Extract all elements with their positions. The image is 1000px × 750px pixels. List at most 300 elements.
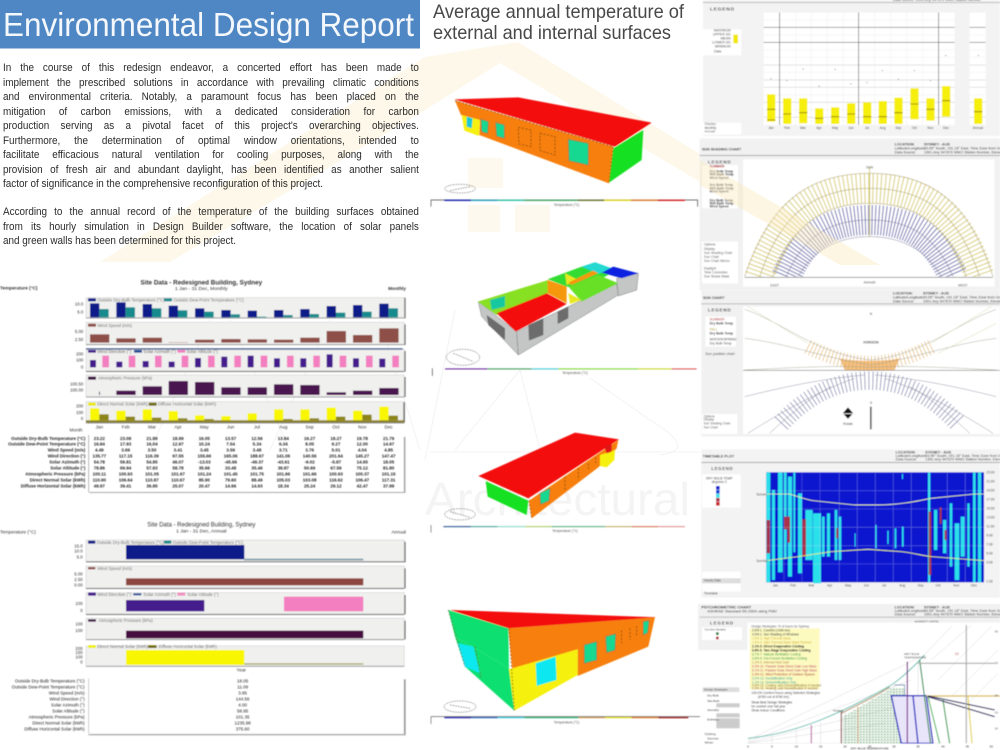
panel 3 bars: Solar Azimuth (°): [143, 349, 176, 354]
month axis: Jul: [254, 424, 260, 429]
temperature axis: 5: [771, 744, 773, 748]
arch base axis: [745, 165, 993, 288]
data table: 46.07: [172, 460, 184, 465]
chart annotation: HUMIDITY RATIO: [915, 620, 939, 624]
axis labels: 200: [75, 646, 83, 651]
data table: 14.66: [225, 484, 237, 489]
data table: 37.99: [383, 484, 395, 489]
strategy list: yellow box: 3.8% 8. Fan-Forced Ventilation Cooling: [752, 656, 807, 660]
data table: 6.34: [279, 442, 288, 447]
side details: [529, 457, 596, 518]
grid lines: [766, 472, 984, 582]
legend: Annual: [705, 130, 715, 134]
strategy list: yellow box: 3.2% 13. Humidification Only: [752, 676, 793, 680]
axis labels: May: [845, 584, 851, 588]
data table: 5.34: [253, 442, 262, 447]
data table: 54.78: [94, 460, 105, 465]
month axis: Month: [70, 428, 83, 433]
data table: 4.49: [95, 448, 104, 453]
body text: paragraph 1: [3, 62, 419, 190]
data table: 13.57: [225, 436, 237, 441]
body text: paragraph 1: facilitate efficacious natural ventilation for cooling purposes, along with the: [3, 149, 419, 161]
axis labels: Dec: [943, 126, 949, 130]
panel 5 bars: Direct Normal Solar (kWh): [97, 402, 148, 407]
data table: 14.65: [357, 460, 368, 465]
axis labels: Apr: [827, 584, 833, 588]
panel 2 bars: 2.50: [75, 337, 84, 342]
data table: 147.47: [382, 454, 396, 459]
legend: LEGEND: [711, 466, 733, 471]
chart title: Temperature (°C): [0, 286, 38, 291]
chart header: [701, 291, 1000, 304]
temperature axis: 10: [795, 744, 798, 748]
data table: 18.05: [237, 678, 249, 683]
legend: Options: [704, 243, 716, 247]
data table: 3.69: [121, 448, 131, 453]
data table: 50.69: [304, 466, 316, 471]
data table: 110.90: [93, 478, 107, 483]
axis labels: 100: [75, 655, 83, 660]
axis labels: 0: [80, 659, 83, 664]
chart header: LOCATION:: [896, 450, 916, 454]
body text: paragraph 2: from its hourly simulation in Design Builder software, the location of solar panels: [3, 220, 419, 232]
data table: 23.22: [94, 436, 105, 441]
comfort scatter: [843, 688, 911, 743]
legend: [702, 307, 737, 434]
body text: paragraph 1: production serving as a pivotal facet of this project's overarching objectives.: [3, 120, 419, 132]
arch base axis: SUN: [866, 165, 874, 169]
axis labels: Jan: [768, 126, 774, 130]
chart header: Data Source:: [895, 613, 916, 617]
data table: 101.66: [303, 472, 317, 477]
panel 5 bars: [76, 402, 404, 422]
window: green: [540, 488, 550, 504]
data table: 4.85: [384, 448, 393, 453]
data table: Outside Dry-Bulb Temperature (°C): [15, 678, 85, 683]
chart header: SUN CHART: [703, 296, 725, 300]
data table: 57.83: [146, 466, 158, 471]
data table: 165.06: [224, 454, 238, 459]
chart title: [0, 279, 406, 292]
strategy list: yellow box: 6.1% 11. Passive Solar Direct Gain High Mass: [752, 668, 817, 672]
body text: paragraph 1: Furthermore, the determination of optimal window orientations, intended to: [3, 134, 419, 146]
wall: green upper: [448, 610, 509, 668]
axis labels: Sep: [918, 584, 924, 588]
axis labels: 19:00: [986, 488, 995, 492]
panel 5 bars: 100: [76, 410, 84, 415]
panel 4 bars: 100.50: [70, 382, 84, 387]
arch base axis: EAST: [770, 284, 779, 288]
data table: 9.27: [332, 442, 341, 447]
data table: -43.61: [277, 460, 290, 465]
axis labels: 5.0: [77, 554, 83, 559]
legend: Sun Shading Chart: [704, 422, 730, 426]
data table: Direct Normal Solar (kWh): [30, 478, 86, 483]
axis labels: Jun: [848, 126, 854, 130]
data table: Diffuse Horizontal Solar (kWh): [24, 727, 85, 732]
chart: psychrometric chart: [698, 604, 1000, 750]
building render: interior section: [432, 262, 697, 376]
data table: 110.67: [171, 478, 185, 483]
chart title: [0, 523, 406, 534]
strategy list: yellow box: 2.1% 5. Direct Evaporative Cooling: [752, 644, 804, 648]
axis labels: 150: [75, 650, 83, 655]
chart title: Monthly: [388, 286, 406, 291]
axis labels: 7:00: [986, 542, 993, 546]
data table: 14.97: [383, 442, 395, 447]
windows: dark grey: [487, 307, 568, 341]
data table: 79.60: [225, 478, 237, 483]
legend: degrees C: [712, 480, 728, 484]
wall: green end: [609, 130, 643, 183]
axis labels: 13:00: [986, 515, 995, 519]
building render: external view 2: [431, 433, 685, 533]
chart: sun shading chart: [700, 138, 1000, 290]
axis labels: Mar: [800, 126, 807, 130]
temperature axis: 15: [819, 744, 823, 748]
data table: 19.78: [357, 436, 368, 441]
comfort polygon: [891, 696, 933, 743]
data table: Diffuse Horizontal Solar (kWh): [21, 484, 86, 489]
comfort note: for comfort over full year: [751, 704, 785, 708]
legend: LEGEND: [710, 621, 734, 626]
axis labels: [756, 470, 995, 588]
data table: 36.85: [146, 484, 158, 489]
wall: yellow: [462, 115, 480, 136]
data table: 145.27: [355, 454, 370, 459]
data table: 201.64: [329, 454, 343, 459]
chart header: Data Source:: [896, 458, 917, 462]
data table: -9.02: [305, 460, 315, 465]
panel 2 bars: 5.00: [75, 329, 84, 334]
partition: orange: [548, 280, 567, 303]
data table: 33.48: [225, 466, 237, 471]
chart header: PSYCHROMETRIC CHART: [701, 604, 752, 609]
wall: orange: [529, 440, 618, 518]
data table: 101.15: [382, 472, 396, 477]
wall: yellow: [509, 649, 578, 711]
strategy list: yellow box: 1.2% 9. Internal Heat Gain: [752, 660, 789, 664]
legend: Daylight: [704, 266, 716, 270]
compass: [444, 701, 476, 712]
comfort note: Show Indoor Conditions: [751, 708, 785, 712]
chart: monthly site data: [0, 279, 406, 493]
horizon line: [743, 369, 1000, 371]
legend: Sun Shade Mask: [704, 274, 730, 278]
month axis: Aug: [279, 424, 288, 429]
compass: [446, 349, 480, 365]
chart header: SYDNEY - AUS: [924, 605, 950, 609]
panel background: [698, 604, 1000, 650]
data table: Wind Speed (m/s): [48, 448, 86, 453]
label: rotate: Rotate: [843, 422, 853, 426]
legend: WINTER/SPRING: [710, 338, 737, 342]
plot area: [743, 307, 1000, 434]
chart header: TIMETABLE PLOT: [703, 454, 735, 458]
heading: average annual temperature: external and internal surfaces: [433, 22, 671, 44]
axis labels: Dec: [971, 584, 977, 588]
icon: up and down arrows: [843, 407, 853, 419]
data table: 1235.98: [235, 721, 251, 726]
dashed frames: [455, 101, 613, 183]
month axis: Nov: [358, 424, 367, 429]
axis labels: Feb: [790, 584, 796, 588]
axis labels: Oct: [912, 126, 917, 130]
plot area: [764, 13, 986, 125]
axis labels: Aug: [880, 126, 886, 130]
axis labels: 5.00: [74, 571, 83, 576]
legend: Data: [714, 49, 721, 53]
data table: 29.12: [330, 484, 342, 489]
body text: paragraph 1: In the course of this redesign endeavor, a concerted effort has been made to: [3, 62, 419, 74]
legends: Outside Dew-Point Temperature (°C): [173, 540, 244, 545]
colour scale: Temperature (°C): [554, 720, 579, 724]
data table: Wind Direction (°): [48, 454, 86, 459]
windows: cyan: [458, 643, 557, 686]
sunrise and sunset lines: [766, 494, 984, 561]
data table: 101.45: [224, 472, 238, 477]
data table: 3.41: [174, 448, 183, 453]
watermark: logo strokes: [150, 310, 700, 460]
axis labels: 5:00: [986, 551, 993, 555]
mean ticks: [767, 101, 982, 120]
axis labels: Sep: [895, 126, 901, 130]
data table: Wind Speed (m/s): [49, 690, 85, 695]
month axis: Jan: [96, 424, 103, 429]
building render: external view 3: [431, 610, 700, 724]
axis labels: 17:00: [986, 497, 995, 501]
legend: LEGEND: [708, 159, 731, 164]
legend: Wet Bulb Temp: [710, 202, 734, 206]
legend: Wet Bulb Temp: [710, 186, 734, 190]
legends: Atmospheric Pressure (kPa): [99, 618, 153, 623]
data table: [8, 435, 405, 493]
legend: Enthalpy: [707, 718, 719, 722]
label: horizon and sun: [863, 312, 879, 405]
axis labels: Nov: [927, 126, 934, 130]
strategy list: yellow box: 0.8% 6. Two-Stage Evaporative Cooling: [752, 648, 811, 652]
data table: 18.34: [278, 484, 289, 489]
data table: 101.05: [145, 472, 159, 477]
legend: Humidity: [707, 708, 719, 712]
data table: 20.47: [199, 484, 210, 489]
body text: paragraph 1: and environmental criteria. Notably, a paramount focus has been placed on the: [3, 91, 419, 103]
window: cyan: [467, 117, 473, 128]
data table: 81.80: [383, 466, 395, 471]
data table: Atmospheric Pressure (kPa): [25, 472, 86, 477]
yellow boxes: [767, 86, 982, 124]
data table: 3.59: [226, 448, 236, 453]
plot area: [743, 159, 995, 287]
chart annotation: 15: [995, 710, 998, 714]
body text: paragraph 2: and green walls has been determined for this project.: [3, 235, 236, 247]
legend: Timetable: [704, 591, 718, 595]
legend: LEGEND: [708, 307, 731, 312]
data table: Outside Dry-Bulb Temperature (°C): [11, 436, 86, 441]
panel 3 bars: [76, 349, 399, 369]
axis labels: 15.0: [74, 543, 83, 548]
grid lines: [747, 625, 1000, 743]
axis labels: 15:00: [986, 506, 995, 510]
legend: Hourly Data: [704, 579, 721, 583]
data table: 23.08: [120, 436, 132, 441]
chart header: Data Source:: [893, 299, 914, 303]
axis labels: 0.00: [74, 582, 83, 587]
axis labels: Jan: [773, 584, 778, 588]
rear rooms: [548, 262, 638, 304]
axis labels: Mar: [808, 584, 815, 588]
body text: paragraph 1: mitigation of carbon emissions, with a dedicated consideration for carbon: [3, 106, 419, 118]
data table: 116.39: [145, 454, 159, 459]
comfort note: [751, 691, 821, 712]
data table: Wind Direction (°): [49, 696, 85, 701]
panels: [86, 298, 404, 422]
panel 3 bars: Wind Direction (°): [97, 349, 132, 354]
legend: FALL: [710, 328, 718, 332]
watermark: pale window squares: [468, 158, 550, 232]
body text: paragraph 2: According to the annual record of the temperature of the building surfaces obtained: [3, 206, 419, 218]
data table: 12.56: [251, 436, 263, 441]
data table: 8.05: [305, 442, 315, 447]
legend: [702, 159, 738, 283]
data table: Direct Normal Solar (kWh): [32, 721, 85, 726]
data table: 54.85: [146, 460, 158, 465]
data table: 18.27: [330, 436, 342, 441]
data table: 188.67: [250, 454, 264, 459]
temperature axis: 40: [941, 744, 945, 748]
roof: [450, 610, 657, 628]
chart annotation: 20: [995, 694, 998, 698]
legend: Sun Chart: [704, 426, 718, 430]
chart header: Latitude/Longitude:: [895, 609, 926, 613]
data table: Outside Dew-Point Temperature (°C): [8, 442, 86, 447]
chart title: 1 Jan - 31 Dec, Annual: [176, 528, 227, 534]
axis labels: May: [832, 126, 838, 130]
legend: Sun Chart: [704, 255, 719, 259]
chart header: [700, 142, 1000, 156]
data table: 110.87: [145, 478, 159, 483]
month axis: [70, 424, 393, 433]
data table: 101.67: [171, 472, 185, 477]
data table: 39.87: [278, 466, 289, 471]
legend: MAXIMUM: [714, 29, 731, 33]
chart header: [701, 450, 1000, 463]
colour scale: [431, 717, 700, 724]
legends: Solar Azimuth (°): [143, 592, 176, 597]
data table: 13.84: [278, 436, 289, 441]
sun path fans: [745, 307, 996, 433]
chart title: Annual: [391, 529, 406, 534]
title banner: Environmental Design Report: [3, 6, 414, 43]
axis labels: Jun: [864, 584, 869, 588]
data table: 59.81: [120, 460, 132, 465]
legends: Diffuse Horizontal Solar (kWh): [159, 644, 217, 649]
data table: 135.77: [92, 454, 107, 459]
temperature axis: 30: [892, 744, 896, 748]
legends: [88, 540, 244, 649]
data table: 103.08: [303, 478, 317, 483]
legend: Dry Bulb: [707, 694, 719, 698]
legend: Wind Speed: [710, 176, 729, 180]
watermark: roof band: [100, 42, 880, 265]
chart annotation: 13: [955, 652, 959, 656]
panel background: [701, 449, 1000, 598]
strategy list: yellow box: 4.0% 2. Sun Shading of Windows: [752, 632, 799, 636]
legend: Wet Bulb: [707, 699, 720, 703]
panel 2 bars: Wind Speed (m/s): [97, 323, 133, 328]
panel 5 bars: 0: [81, 416, 84, 421]
axis labels: [74, 543, 246, 672]
data table: 155.66: [197, 454, 212, 459]
data table: 3.45: [200, 448, 209, 453]
axis labels: 11:00: [986, 524, 995, 528]
data table: -45.66: [224, 460, 238, 465]
month axis: Sep: [305, 424, 314, 429]
panel 1 bars: 5.0: [77, 310, 84, 315]
panel background: [701, 290, 1000, 437]
panel 4 bars: [70, 376, 399, 395]
axis labels: 9:00: [986, 533, 993, 537]
legend: Comfort Models: [705, 628, 726, 632]
axis labels: 21:00: [986, 479, 995, 483]
legend: Display: [704, 418, 714, 422]
wall: green: [486, 481, 528, 515]
temperature axis: 45: [966, 744, 969, 748]
arch base axis: Azimuth: [864, 280, 876, 284]
data table: Atmospheric Pressure (kPa): [29, 714, 85, 719]
data table: 116.62: [329, 478, 343, 483]
legend: Dry Bulb Temp: [710, 169, 733, 173]
data table: 100.37: [355, 472, 370, 477]
legend: LOWER SD: [712, 41, 731, 45]
chart header: Latitude/Longitude:: [895, 146, 926, 150]
chart title: Site Data - Redesigned Building, Sydney: [147, 523, 255, 529]
panel 1 bars: Outside Dew-Point Temperature (°C): [173, 297, 244, 302]
panel 3 bars: 200: [76, 352, 84, 357]
data table: 16.84: [94, 442, 105, 447]
legends: Solar Altitude (°): [187, 592, 219, 597]
label: horizon and sun: HORIZON: [863, 340, 879, 344]
strategy list: yellow box: 1.6% 4. High Thermal Mass Night Flushed: [752, 640, 811, 644]
data table: 100.93: [329, 472, 343, 477]
data table: -13.03: [198, 460, 211, 465]
axis labels: Annual: [973, 126, 983, 130]
data table: 141.06: [276, 454, 291, 459]
heading: average annual temperature: [433, 1, 685, 44]
legend: Monthly: [705, 126, 717, 130]
chart: temperature plot: [701, 449, 1000, 598]
panel 4 bars: 100.00: [70, 388, 84, 393]
chart: monthly diurnal averages box plot: [703, 0, 1000, 136]
chart annotation: 30: [995, 630, 998, 634]
interior wall: lime: [478, 280, 548, 315]
legend: Sun Shading Chart: [704, 251, 732, 255]
axis labels: Jul: [882, 584, 886, 588]
strategy list: yellow box: Design Strategies: % of hours for Sydney: [751, 624, 809, 628]
month axis: Feb: [122, 424, 130, 429]
data table: 17.93: [120, 442, 132, 447]
legend: Wind Speed: [710, 205, 729, 209]
data table: 42.47: [357, 484, 368, 489]
legends: Wind Speed (m/s): [97, 566, 133, 571]
legend: [702, 621, 742, 745]
annex roof: [604, 443, 612, 453]
legend: Summer: [707, 736, 719, 740]
data table: 100.93: [119, 472, 133, 477]
strategy list: yellow box: 6.7% 7. Natural Ventilation Cooling: [752, 652, 801, 656]
chart header: [700, 604, 1000, 618]
heading: average annual temperature: Average annual temperature of: [433, 1, 685, 23]
